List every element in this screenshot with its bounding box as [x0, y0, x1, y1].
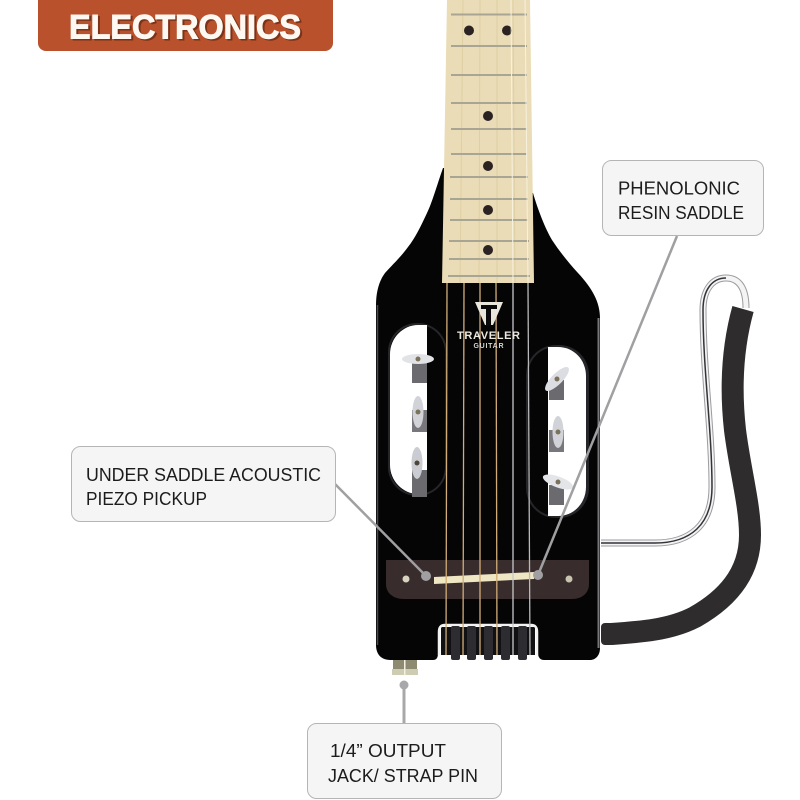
- callout: phenolonic resin saddle: [602, 160, 764, 236]
- strap rest foam padding: [611, 309, 750, 634]
- callout: under saddle acoustic piezo pickup: UNDER SADDLE ACOUSTIC: [86, 465, 321, 485]
- left tuners: [402, 354, 434, 497]
- callout: under saddle acoustic piezo pickup: PIEZO PICKUP: [86, 489, 207, 509]
- right window: [526, 345, 589, 518]
- guitar body: [376, 168, 600, 660]
- logo: Traveler Guitar: TRAVELER: [457, 330, 520, 342]
- maple neck with frets: [442, 0, 534, 283]
- pointer: saddle: [533, 236, 677, 580]
- callout: output jack / strap pin: 1/4” OUTPUT: [330, 741, 446, 761]
- header banner: ELECTRONICS: [71, 10, 303, 48]
- header banner: ELECTRONICS: [69, 8, 301, 46]
- callout: phenolonic resin saddle: PHENOLONIC: [618, 178, 740, 198]
- callout: output jack / strap pin: [308, 724, 502, 798]
- callout: output jack / strap pin: JACK/ STRAP PIN: [328, 766, 478, 786]
- callout: under saddle acoustic piezo pickup: [72, 446, 336, 522]
- right tuners: [541, 364, 575, 505]
- bridge with saddle: [386, 560, 589, 599]
- logo: Traveler Guitar: [457, 302, 520, 350]
- strap rest wire: [601, 278, 746, 543]
- logo: Traveler Guitar: GUITAR: [474, 343, 504, 350]
- foam end cap: [601, 623, 615, 645]
- pointer: pickup: [335, 484, 431, 581]
- strings: [446, 283, 530, 655]
- header banner: [38, 0, 333, 51]
- pointer: output jack: [400, 680, 408, 723]
- string anchor block: [439, 625, 537, 660]
- output jack: [392, 660, 418, 675]
- left window: [388, 323, 447, 496]
- callout: phenolonic resin saddle: RESIN SADDLE: [618, 203, 744, 223]
